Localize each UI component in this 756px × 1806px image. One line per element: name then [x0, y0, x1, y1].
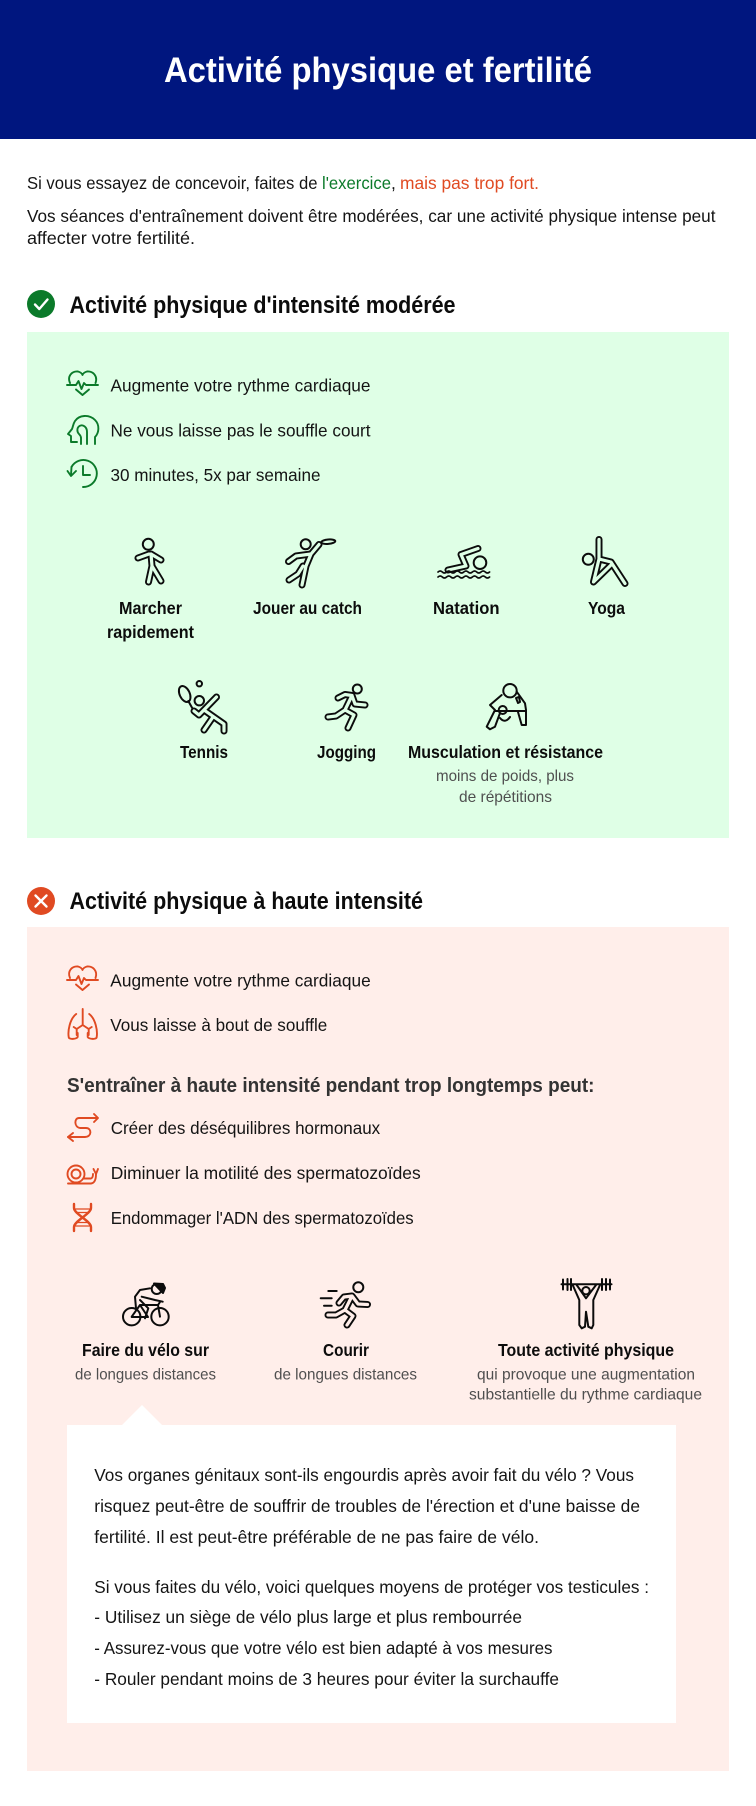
activity: strength training: moins de poids, plus [436, 768, 574, 785]
icon: lungs [68, 1009, 97, 1039]
intro text: , [391, 173, 396, 193]
activity: any intense activity: qui provoque une augmentation [477, 1366, 695, 1384]
activity: catch [253, 539, 362, 618]
activity: swimming [433, 548, 500, 618]
activity: cycling [75, 1284, 216, 1384]
activity: any intense activity: substantielle du rythme cardiaque [469, 1386, 702, 1404]
heading: high intensity: Activité physique à haute intensité [70, 888, 423, 915]
callout: cycling advice: Si vous faites du vélo, voici quelques moyens de protéger vos testicules : [94, 1577, 649, 1597]
icon: jogger [328, 684, 365, 728]
panel: high intensity [27, 927, 729, 1771]
intro text: l'exercice [322, 173, 391, 193]
icon: clock with arrow [68, 460, 97, 487]
intro text: affecter votre fertilité. [27, 228, 195, 248]
activity: cycling: de longues distances [75, 1366, 216, 1384]
activity: tennis: Tennis [180, 742, 228, 762]
callout: cycling advice: - Utilisez un siège de vélo plus large et plus rembourrée [94, 1607, 522, 1627]
icon: frisbee player [288, 539, 335, 585]
activity: walking: rapidement [107, 622, 194, 642]
activity: strength training: Musculation et résistance [408, 742, 603, 762]
activity: cycling: Faire du vélo sur [82, 1340, 209, 1360]
list item: out of breath: Vous laisse à bout de souffle [110, 1015, 327, 1035]
heading: moderate intensity: Activité physique d'intensité modérée [70, 292, 456, 319]
intro text: Si vous essayez de concevoir, faites de [27, 173, 318, 193]
activity: jogging [317, 684, 376, 762]
list item: heart rate: Augmente votre rythme cardiaque [110, 376, 370, 396]
icon: snail [68, 1166, 98, 1184]
icon: tennis player [177, 681, 224, 731]
list item: motility: Diminuer la motilité des spermatozoïdes [111, 1163, 421, 1183]
callout: cycling advice: risquez peut-être de souffrir de troubles de l'érection et d'une baisse de [94, 1496, 640, 1516]
activity: any intense activity: Toute activité physique [498, 1340, 674, 1360]
list item: breath: Ne vous laisse pas le souffle court [110, 420, 371, 440]
subheading: consequences: S'entraîner à haute intensité pendant trop longtemps peut: [67, 1074, 594, 1097]
activity: yoga: Yoga [588, 598, 625, 618]
activity: catch: Jouer au catch [253, 598, 362, 618]
activity: running [274, 1282, 417, 1384]
icon: cyclist [123, 1284, 169, 1325]
list item: duration [68, 460, 320, 487]
callout: cycling advice: Vos organes génitaux sont-ils engourdis après avoir fait du vélo ? Vous [94, 1465, 634, 1485]
intro text: Vos séances d'entraînement doivent être modérées, car une activité physique intense peut [27, 206, 716, 226]
icon: DNA helix [74, 1204, 91, 1231]
list item: out of breath [68, 1009, 327, 1039]
icon: barbell lifter [562, 1279, 612, 1328]
panel: moderate intensity [27, 332, 729, 838]
activity: walking: Marcher [119, 598, 182, 618]
icon: red cross [27, 887, 55, 915]
activity: running: Courir [323, 1340, 369, 1360]
intro text: mais pas trop fort. [400, 173, 539, 193]
list item: DNA [74, 1204, 414, 1231]
callout: cycling advice: fertilité. Il est peut-être préférable de ne pas faire de vélo. [94, 1527, 539, 1547]
list item: hormones: Créer des déséquilibres hormonaux [111, 1118, 380, 1138]
list item: breath [68, 416, 371, 444]
callout: cycling advice: - Rouler pendant moins de 3 heures pour éviter la surchauffe [94, 1669, 559, 1689]
icon: weight lifter bent [487, 684, 526, 729]
activity: tennis [177, 681, 228, 762]
callout: cycling advice [67, 1405, 676, 1723]
activity: strength training [408, 684, 603, 806]
icon: heart pulse [67, 371, 98, 395]
icon: green check [27, 290, 55, 318]
activity: swimming: Natation [433, 598, 500, 618]
icon: walker [138, 539, 161, 582]
activity: walking [107, 539, 194, 642]
icon: yoga pose [583, 540, 625, 584]
list item: DNA: Endommager l'ADN des spermatozoïdes [111, 1208, 414, 1228]
activity: any intense activity [469, 1279, 702, 1404]
list item: heart rate: Augmente votre rythme cardiaque [110, 970, 371, 990]
icon: head and airway [68, 416, 98, 444]
activity: running: de longues distances [274, 1366, 417, 1384]
activity: jogging: Jogging [317, 742, 376, 762]
intro text [27, 173, 716, 248]
activity: yoga [583, 540, 625, 618]
icon: swimmer [438, 548, 490, 578]
title: Activité physique et fertilité [164, 51, 592, 90]
header banner [0, 0, 756, 139]
list item: duration: 30 minutes, 5x par semaine [110, 465, 320, 485]
icon: crossing arrows [68, 1114, 98, 1141]
list item: hormones [68, 1114, 380, 1141]
callout: cycling advice: - Assurez-vous que votre vélo est bien adapté à vos mesures [94, 1638, 553, 1658]
icon: heart pulse [67, 966, 98, 990]
activity: strength training: de répétitions [459, 789, 552, 806]
icon: runner [321, 1282, 368, 1325]
